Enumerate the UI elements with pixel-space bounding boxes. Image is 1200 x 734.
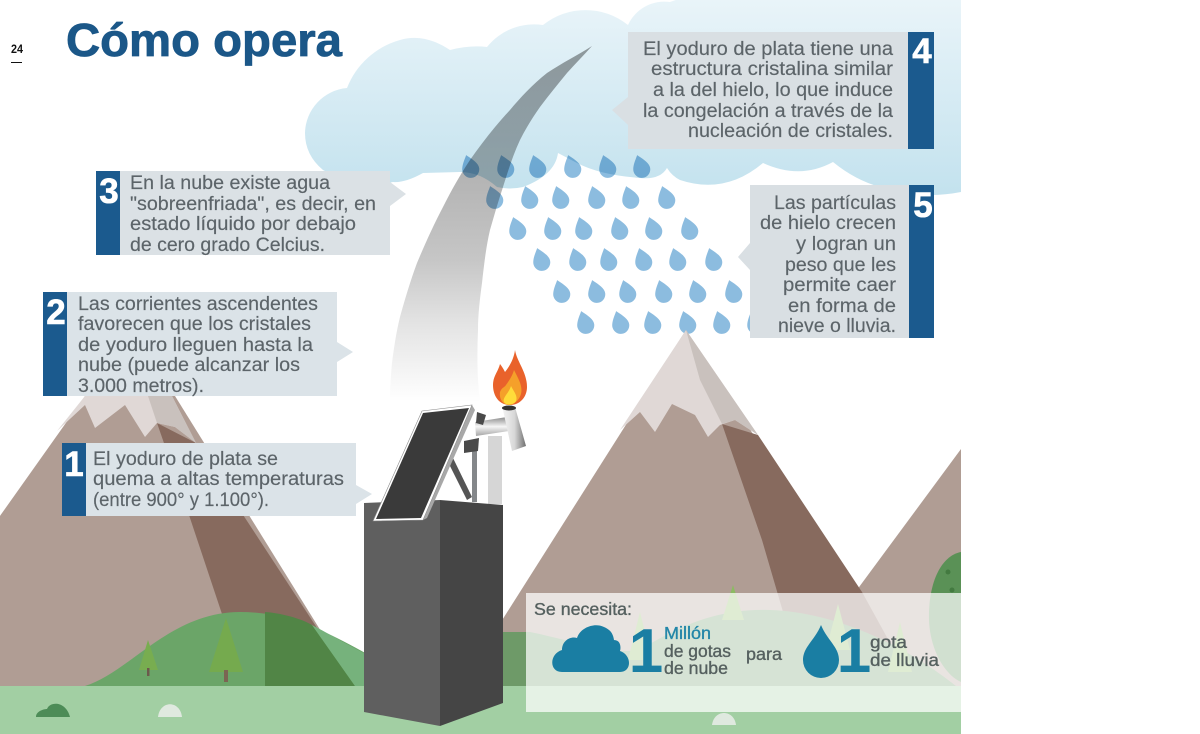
callout 4: a la del hielo, lo que induce — [653, 80, 893, 101]
callout 5: nieve o lluvia. — [778, 316, 896, 337]
page number — [11, 42, 23, 63]
text: rain drop: gota — [870, 632, 907, 652]
left mountain — [0, 396, 355, 686]
callout 2 — [43, 292, 353, 397]
callout 2: favorecen que los cristales — [78, 314, 311, 335]
number: 1 drop: 1 — [837, 617, 871, 686]
callout 5: 5 — [913, 186, 933, 225]
icon: cloud — [552, 625, 629, 672]
callout 2: 3.000 metros). — [78, 376, 204, 397]
ground — [0, 686, 961, 734]
cloud — [305, 0, 961, 195]
heading: se necesita: Se necesita: — [534, 599, 632, 619]
callout 1: El yoduro de plata se — [93, 449, 278, 470]
title: Cómo opera — [66, 14, 342, 66]
callout 2: Las corrientes ascendentes — [78, 294, 318, 315]
callout 2: 2 — [46, 293, 66, 332]
page number: 24 — [11, 42, 23, 56]
flame — [493, 350, 527, 405]
callout 5: Las partículas — [774, 193, 896, 214]
trees — [139, 585, 912, 682]
solar panel — [373, 405, 475, 521]
text: para: para — [746, 644, 782, 664]
ground bush and stones — [36, 704, 736, 725]
callout 4: 4 — [912, 32, 932, 71]
callout 3: de cero grado Celcius. — [130, 235, 325, 256]
callout 2: de yoduro lleguen hasta la — [78, 335, 313, 356]
tower body — [364, 500, 503, 726]
text: million drops: de nube — [664, 658, 728, 678]
callout 5: en forma de — [788, 296, 896, 317]
text: million drops — [664, 623, 731, 678]
tower rear supports — [448, 436, 502, 504]
callout 2: nube (puede alcanzar los — [78, 355, 300, 376]
text: rain drop: de lluvia — [870, 650, 939, 670]
callout 4: la congelación a través de la — [643, 101, 893, 122]
panel: se necesita — [526, 593, 961, 712]
callout 5: permite caer — [783, 275, 897, 296]
callout 5: y logran un — [796, 234, 896, 255]
falling drops — [458, 152, 766, 336]
text: million drops: de gotas — [664, 641, 731, 661]
center mountain — [480, 330, 905, 680]
callout 1: (entre 900° y 1.100°). — [93, 490, 269, 511]
bush right — [929, 552, 961, 682]
callout 1: quema a altas temperaturas — [93, 469, 344, 490]
green hills — [85, 610, 961, 700]
text: rain drop — [870, 632, 939, 670]
callout 1: 1 — [64, 445, 84, 484]
burner tower — [364, 350, 527, 726]
callout 5: de hielo crecen — [760, 213, 896, 234]
torch pipe — [464, 406, 526, 453]
callout 3: estado líquido por debajo — [130, 214, 356, 235]
icon: drop — [803, 625, 839, 678]
callout 5: peso que les — [785, 255, 896, 276]
callout 1 — [62, 443, 372, 516]
callout 3: 3 — [99, 172, 119, 211]
callout 4: nucleación de cristales. — [688, 121, 893, 142]
ascending smoke plume — [390, 46, 592, 402]
right mountain — [820, 449, 961, 690]
text: million drops: Millón — [664, 623, 711, 643]
number: 1 million: 1 — [629, 617, 663, 686]
callout 5 — [738, 185, 934, 338]
callout 4 — [612, 32, 934, 149]
callout 3 — [96, 171, 406, 256]
callout 4: El yoduro de plata tiene una — [643, 39, 893, 60]
callout 4: estructura cristalina similar — [651, 59, 894, 80]
callout 3: En la nube existe agua — [130, 173, 330, 194]
callout 3: "sobreenfriada", es decir, en — [130, 194, 376, 215]
